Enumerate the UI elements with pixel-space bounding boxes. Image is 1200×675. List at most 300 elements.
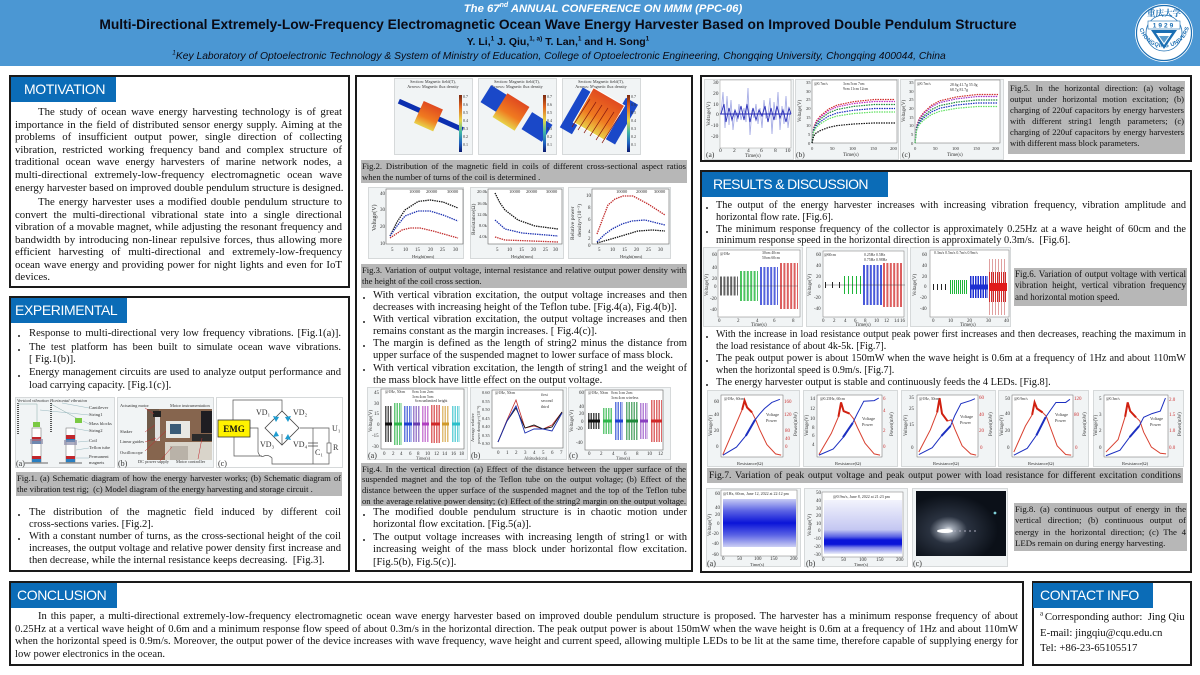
figure 6: excitation voltage charts: 10 bbox=[948, 319, 954, 324]
figure 7: load resistance charts: 14 bbox=[810, 397, 816, 402]
caption: figure 4 bbox=[361, 463, 687, 506]
figure 8: continuous output charts and LED photo bbox=[706, 488, 1008, 568]
text: conclusion paragraph: low power electronics in the ocean. bbox=[15, 649, 165, 660]
figure 7: load resistance charts: 3 bbox=[1099, 413, 1102, 418]
figure 2: magnetic field simulations: 0.4 bbox=[463, 118, 468, 123]
figure 8: continuous output charts and LED photo: @1Hz, 60cm, June 12, 2022 at 22:12 pm bbox=[723, 491, 790, 497]
figure 4: vertical direction charts bbox=[367, 387, 671, 460]
icon: university logo: 重庆大学 bbox=[1147, 7, 1181, 19]
figure 7: load resistance charts: 0.0 bbox=[1169, 446, 1176, 451]
figure 4: vertical direction charts: 0cm 1cm 2cm bbox=[412, 390, 434, 394]
figure 4: vertical direction charts: Voltage(V) bbox=[369, 410, 374, 432]
title: Multi-Directional Extremely-Low-Frequency Electromagnetic Ocean Wave Energy Harvester Based on Improved Double Pendulum Structure bbox=[99, 17, 1017, 32]
figure 5: horizontal charts: 25 bbox=[806, 97, 811, 102]
figure 1a: harvester schematic: magnets bbox=[89, 460, 105, 465]
figure 5: horizontal charts: 150 bbox=[973, 146, 981, 151]
bullet list: horizontal excitation findings: [Fig.5(b), Fig.5(c)]. bbox=[373, 557, 456, 568]
figure 7: load resistance charts: Voltage(V) bbox=[904, 414, 909, 436]
bullet list: experimental setup: The test platform has been built to simulate ocean wave vibrations. bbox=[29, 342, 341, 353]
figure 4: vertical direction charts: 0 bbox=[581, 420, 584, 425]
bullet list: horizontal excitation findings: The modified double pendulum structure is in chaotic motion under bbox=[373, 507, 687, 518]
heading: conclusion: CONCLUSION bbox=[17, 587, 106, 603]
figure 8: continuous output charts and LED photo: Voltage(V) bbox=[808, 514, 813, 536]
figure 2: magnetic field simulations: 0.7 bbox=[463, 94, 468, 99]
figure 7: load resistance charts: 6 bbox=[883, 397, 886, 402]
figure 4: vertical direction charts: 0.45 bbox=[482, 416, 490, 421]
figure 2: magnetic field simulations: Arrows: Magnetic flux density bbox=[575, 84, 628, 89]
figure 7: load resistance charts: 0 bbox=[911, 446, 914, 451]
figure 3: coil height charts: Relative power bbox=[570, 206, 576, 240]
figure 5: horizontal charts bbox=[704, 79, 1004, 160]
figure 2: magnetic field simulations: 0.3 bbox=[547, 126, 552, 131]
text: motivation paragraph two: ocean wave energy and providing power for night lights and even for IoT bbox=[15, 258, 342, 270]
figure 5: horizontal charts: Voltage(V) bbox=[705, 101, 712, 126]
figure 5: horizontal charts: 30 bbox=[909, 89, 914, 94]
figure 6: excitation voltage charts: 6 bbox=[854, 319, 857, 324]
figure 6: excitation voltage charts: 6 bbox=[773, 319, 776, 324]
text: motivation paragraph one: multi-directional extremely-low-frequency electromagnetic ocean wave bbox=[15, 169, 342, 181]
figure 4: vertical direction charts: -30 bbox=[372, 445, 379, 450]
figure 4: vertical direction charts: Time(s) bbox=[616, 456, 631, 460]
figure 2: magnetic field simulations: 0.1 bbox=[631, 142, 636, 147]
figure 5: horizontal charts: 0 bbox=[719, 148, 722, 154]
bullet list: vertical excitation findings: With vertical vibration excitation, the length of string1 and the weight of bbox=[373, 363, 687, 374]
figure 6: excitation voltage charts: -20 bbox=[814, 296, 821, 301]
caption: figure 1 bbox=[16, 472, 342, 496]
text: motivation paragraph one: problems of insufficient output power, single direction of collecting bbox=[15, 131, 342, 143]
figure 7: load resistance charts: 15 bbox=[909, 423, 914, 428]
figure 3: coil height charts: 15 bbox=[519, 248, 524, 253]
figure 2: magnetic field simulations: Arrows: Magnetic flux density bbox=[407, 84, 460, 89]
figure 3: coil height charts: 40 bbox=[380, 192, 386, 197]
text: motivation paragraph two: devices. bbox=[15, 271, 50, 283]
text: motivation paragraph one: vibration, restricted working frequency band and complex structure of bbox=[15, 144, 342, 156]
figure 7: load resistance charts: Voltage bbox=[1150, 416, 1163, 421]
bullet list: results two: The peak output power is about 150mW when the wave height is 0.6m at a frequency of 1Hz and about 110mW bbox=[716, 353, 1186, 364]
figure 1c: harvesting circuit diagram: VD₄ bbox=[293, 440, 308, 449]
figure 4: vertical direction charts: 8 bbox=[417, 452, 420, 457]
bullet list: coil findings: With a constant number of turns, as the cross-sectional height of the coil bbox=[29, 531, 341, 542]
figure 4: vertical direction charts: power density×(10⁻⁵) bbox=[476, 405, 481, 444]
figure 7: load resistance charts: Resistance(Ω) bbox=[933, 461, 960, 466]
figure 4: vertical direction charts: first bbox=[541, 392, 549, 397]
figure 4: vertical direction charts: 0 bbox=[377, 423, 380, 428]
figure 6: excitation voltage charts: Voltage(V) bbox=[913, 274, 918, 296]
figure 5: horizontal charts: -10 bbox=[711, 123, 719, 129]
figure 4: vertical direction charts: -15 bbox=[372, 434, 379, 439]
figure 4: vertical direction charts: @1Hz, 50cm bbox=[385, 390, 405, 395]
figure 8: continuous output charts and LED photo: 0 bbox=[818, 529, 821, 534]
figure 5: horizontal charts: 30 bbox=[713, 80, 719, 86]
figure 2: magnetic field simulations: 0.4 bbox=[547, 118, 552, 123]
figure 7: load resistance charts: Voltage(V) bbox=[709, 414, 714, 436]
figure 3: coil height charts: 30 bbox=[380, 208, 386, 213]
figure 4: vertical direction charts: 6 bbox=[624, 452, 627, 457]
figure 7: load resistance charts: 60 bbox=[714, 400, 720, 405]
figure 5: horizontal charts: @0.7m/s bbox=[814, 82, 828, 86]
figure 7: load resistance charts: 50 bbox=[1005, 397, 1010, 402]
figure 1a: harvester schematic: Vertical vibration bbox=[17, 398, 49, 403]
caption: figure 5: charging of 220uf capacitors by energy harvesters bbox=[1010, 105, 1184, 115]
bullet list: coil findings bbox=[18, 507, 341, 566]
figure 2: magnetic field simulations: 0.7 bbox=[547, 94, 552, 99]
text: motivation paragraph one: traditional ocean wave energy harvesters of marine network nodes, a bbox=[15, 156, 342, 168]
figure 1b: vibration test rig photo: DC power supply bbox=[138, 459, 170, 464]
caption: figure 1: the vibration test rig; (c) Model diagram of the energy harvesting and storage circuit . bbox=[17, 484, 313, 494]
caption: figure 4: suspended magnet and the top of the Teflon tube on the output voltage; (b) Effect of the bbox=[362, 474, 686, 484]
bullet list: experimental setup: [ Fig.1(b)]. bbox=[29, 354, 76, 365]
figure 4: vertical direction charts: 40 bbox=[579, 405, 584, 410]
caption: figure 4: distance between the upper surface of the suspended magnet and the top of the Teflon tube bbox=[362, 485, 686, 495]
figure 6: excitation voltage charts: 4 bbox=[844, 319, 847, 324]
panel: results and discussion bbox=[700, 170, 1192, 573]
heading: conclusion bbox=[11, 583, 117, 608]
caption: figure 8: Fig.8. (a) continuous output of energy in the bbox=[1015, 504, 1186, 514]
figure 7: load resistance charts: 0 bbox=[716, 445, 719, 450]
figure 2: magnetic field simulations: 0.2 bbox=[631, 134, 636, 139]
figure 3: coil height charts: 10 bbox=[610, 248, 616, 253]
bullet list: coil findings: then decrease, while the internal resistance keeps decreasing. [Fig.3]. bbox=[29, 555, 325, 566]
figure 7: load resistance charts: 6 bbox=[812, 434, 815, 439]
figure 3: coil height charts: 16.0k bbox=[477, 201, 488, 206]
figure 3: coil height charts: 20.0k bbox=[477, 189, 488, 194]
figure 2: magnetic field simulations: Section: Magnetic field(T), bbox=[410, 79, 456, 85]
text: conclusion paragraph: In this paper, a multi-directional extremely-low-frequency electromagnetic ocean wave energy harvester based on improved double pendulum structure is proposed. The harvester has a minimum response frequency of about bbox=[38, 611, 1018, 622]
figure 1c: harvesting circuit diagram: (c) bbox=[218, 459, 227, 468]
caption: figure 4: Fig.4. In the vertical direction (a) Effect of the distance between the upper surface of the bbox=[362, 464, 686, 474]
figure 7: load resistance charts: Voltage(V) bbox=[1094, 414, 1099, 436]
figure 1c: harvesting circuit diagram: EMG bbox=[223, 424, 245, 434]
figure 6: excitation voltage charts: 60 bbox=[712, 253, 718, 258]
figure 7: load resistance charts: 120 bbox=[1074, 397, 1082, 402]
figure 5: horizontal charts: 10 bbox=[785, 148, 791, 154]
figure 1a: harvester schematic: Permanent bbox=[89, 454, 109, 459]
figure 4: vertical direction charts: 6cm unlimited height bbox=[415, 399, 448, 403]
figure 2: magnetic field simulations: 0.3 bbox=[631, 126, 636, 131]
figure 6: excitation voltage charts: Voltage(V) bbox=[808, 274, 813, 296]
figure 8: continuous output charts and LED photo: @0.9m/s, June 8, 2022 at 21:23 pm bbox=[833, 494, 891, 500]
figure 2: magnetic field simulations: 0.1 bbox=[547, 142, 552, 147]
figure 4: vertical direction charts: Altitude(cm) bbox=[524, 456, 548, 460]
figure 4: vertical direction charts: 4 bbox=[612, 452, 615, 457]
figure 3: coil height charts: Voltage(V) bbox=[371, 204, 378, 231]
caption: figure 8: energy in the horizontal direction; (c) The 4 bbox=[1015, 527, 1186, 537]
figure 3: coil height charts: 8 bbox=[588, 206, 591, 211]
figure 5: horizontal charts: (a) bbox=[706, 150, 715, 159]
figure 5: horizontal charts: 5 bbox=[808, 132, 811, 137]
figure 7: load resistance charts: Resistance(Ω) bbox=[1122, 461, 1149, 466]
text: conclusion paragraph bbox=[15, 611, 1018, 660]
figure 4: vertical direction charts: 2 bbox=[515, 451, 518, 456]
figure 3: coil height charts: 2 bbox=[588, 237, 591, 242]
figure 6: excitation voltage charts: 40 bbox=[1004, 319, 1010, 324]
figure 7: load resistance charts: 35 bbox=[909, 396, 914, 401]
figure 6: excitation voltage charts: 8 bbox=[792, 319, 795, 324]
figure 6: excitation voltage charts: -40 bbox=[814, 307, 821, 312]
bullet list: vertical excitation findings: remains constant as the margin increases. [ Fig.4(c)]. bbox=[373, 326, 597, 337]
figure 1b: vibration test rig photo: Motor controller bbox=[176, 459, 206, 464]
figure 6: excitation voltage charts: 20 bbox=[712, 277, 718, 282]
figure 2: magnetic field simulations: 0.5 bbox=[463, 110, 468, 115]
figure 8: continuous output charts and LED photo: 40 bbox=[715, 506, 720, 511]
figure 2: magnetic field simulations: Arrows: Magnetic flux density bbox=[491, 84, 544, 89]
bullet list: coil findings: increases, the output voltage and relative power density first increase and bbox=[29, 543, 341, 554]
figure 7: load resistance charts: 40 bbox=[1005, 412, 1010, 417]
figure 7: load resistance charts: 80 bbox=[1074, 413, 1080, 418]
figure 2: magnetic field simulations: 0.2 bbox=[463, 134, 468, 139]
figure 7: load resistance charts: Resistance(Ω) bbox=[1028, 461, 1055, 466]
bullet list: coil findings: The distribution of the magnetic field induced by different coil bbox=[29, 507, 341, 518]
figure 7: load resistance charts: Resistance(Ω) bbox=[737, 461, 764, 466]
figure 6: excitation voltage charts: 8 bbox=[864, 319, 867, 324]
figure 3: coil height charts: 30000 bbox=[654, 189, 666, 194]
figure 6: excitation voltage charts: 30 bbox=[986, 319, 992, 324]
caption: figure 5: with different string1 length parameters; (c) bbox=[1010, 116, 1184, 126]
figure 3: coil height charts: 10 bbox=[380, 242, 386, 247]
text: motivation paragraph two: The energy harvester uses a modified double pendulum structure to bbox=[38, 196, 342, 208]
figure 5: horizontal charts: 25 bbox=[909, 97, 914, 102]
figure 8: continuous output charts and LED photo: -10 bbox=[814, 537, 821, 542]
figure 7: load resistance charts: Power(mW) bbox=[989, 412, 994, 436]
figure 4: vertical direction charts: 10 bbox=[425, 452, 430, 457]
figure 7: load resistance charts: 0 bbox=[980, 446, 983, 451]
figure 7: load resistance charts: Power bbox=[1150, 422, 1162, 427]
figure 5: horizontal charts: 50 bbox=[830, 146, 835, 151]
figure 8: continuous output charts and LED photo: 50 bbox=[841, 558, 846, 563]
bullet list: horizontal excitation findings bbox=[363, 507, 687, 568]
figure 4: vertical direction charts: 6 bbox=[409, 452, 412, 457]
figure 7: load resistance charts: Voltage bbox=[862, 416, 875, 421]
figure 6: excitation voltage charts: 0 bbox=[714, 285, 717, 290]
figure 4: vertical direction charts: 3cm 4cm 5cm bbox=[412, 395, 434, 399]
figure 1c: harvesting circuit diagram: U₁ bbox=[332, 424, 341, 433]
figure 4: vertical direction charts: 1 bbox=[506, 451, 509, 456]
figure 5: horizontal charts: Voltage(V) bbox=[902, 100, 907, 122]
figure 3: coil height charts: 20 bbox=[428, 248, 434, 253]
figure 5: horizontal charts: 0 bbox=[811, 146, 814, 151]
figure 7: load resistance charts: 12 bbox=[810, 407, 816, 412]
text: motivation paragraph two: bandwidth by introducing non-linear repulsive forces, thus allowing more bbox=[15, 234, 342, 246]
figure 5: horizontal charts: 20 bbox=[909, 106, 914, 111]
caption: figure 3: Fig.3. Variation of output voltage, internal resistance and relative output power density with bbox=[362, 265, 686, 275]
caption: figure 1: Fig.1. (a) Schematic diagram of how the energy harvester works; (b) Schematic diagram of bbox=[17, 473, 341, 483]
figure 8: continuous output charts and LED photo: (c) bbox=[913, 559, 922, 568]
figure 7: load resistance charts: Power(mW) bbox=[890, 412, 895, 436]
figure 5: horizontal charts: 20 bbox=[713, 91, 719, 97]
figure 7: load resistance charts: 120 bbox=[784, 413, 792, 418]
figure 7: load resistance charts: 10 bbox=[810, 417, 816, 422]
figure 5: horizontal charts: 8 bbox=[774, 148, 777, 154]
figure 1a: harvester schematic bbox=[15, 397, 115, 468]
bullet list: horizontal excitation findings: horizontal flow excitation. [Fig.5(a)]. bbox=[373, 519, 531, 530]
figure 8: continuous output charts and LED photo: Time(s) bbox=[750, 562, 765, 567]
text: conclusion paragraph: 0.25Hz at a vertical wave height of 0.6m and a minimum response flow speed of about 0.3m/s in the horizontal direction. The peak output power is about 150mW when the wave height is 0.6m at a frequency of 1Hz and about 110mW bbox=[15, 624, 1018, 635]
figure 6: excitation voltage charts: 40 bbox=[922, 264, 928, 269]
figure 4: vertical direction charts: @1Hz, 50cm bbox=[588, 391, 608, 396]
caption: figure 2: when the number of turns of the coil is determined . bbox=[362, 172, 540, 182]
bullet list: results one: minimum response speed in the horizontal direction is approximately 0.3m/s. [Fig.6]. bbox=[716, 235, 1070, 246]
figure 8: continuous output charts and LED photo: Time(s) bbox=[854, 562, 869, 567]
figure 3: coil height charts: 25 bbox=[440, 248, 446, 253]
figure 4: vertical direction charts: 0cm 1cm 2cm bbox=[611, 391, 633, 395]
figure 8: continuous output charts and LED photo: 20 bbox=[816, 514, 822, 519]
figure 5: horizontal charts: 20 bbox=[806, 106, 811, 111]
caption: figure 6: vibration height, vertical vibration frequency bbox=[1015, 280, 1186, 290]
figure 5: horizontal charts: 5 bbox=[911, 132, 914, 137]
caption: figure 8: vertical direction; (b) continuous output of bbox=[1015, 515, 1186, 525]
figure 3: coil height charts: 25 bbox=[646, 248, 652, 253]
figure 6: excitation voltage charts bbox=[703, 247, 1011, 327]
figure 7: load resistance charts: Power bbox=[766, 418, 778, 423]
figure 4: vertical direction charts: 0.60 bbox=[482, 390, 490, 395]
figure 1a: harvester schematic: Coil bbox=[89, 438, 98, 443]
figure 6: excitation voltage charts: @1Hz bbox=[720, 252, 730, 256]
figure 4: vertical direction charts: 3 bbox=[524, 451, 527, 456]
figure 5: horizontal charts: 200 bbox=[890, 146, 898, 151]
figure 7: load resistance charts: 4 bbox=[883, 409, 886, 414]
figure 1c: harvesting circuit diagram: VD₁ bbox=[256, 408, 271, 417]
figure 2: magnetic field simulations: 0.6 bbox=[631, 102, 636, 107]
figure 4: vertical direction charts: Average relative bbox=[470, 413, 475, 442]
figure 8: continuous output charts and LED photo: 20 bbox=[715, 513, 720, 518]
heading: results and discussion bbox=[702, 172, 888, 197]
figure 6: excitation voltage charts: 0 bbox=[818, 285, 821, 290]
caption: figure 5: charging of 220uf capacitors by energy harvesters bbox=[1010, 127, 1184, 137]
figure 8: continuous output charts and LED photo: 200 bbox=[896, 558, 904, 563]
figure 7: load resistance charts: @0.3m/s bbox=[1106, 397, 1120, 401]
figure 2: magnetic field simulations: Section: Magnetic field(T), bbox=[578, 79, 624, 85]
figure 3: coil height charts: 20000 bbox=[526, 189, 538, 194]
figure 4: vertical direction charts: 0 bbox=[588, 452, 591, 457]
figure 6: excitation voltage charts: 60 bbox=[922, 253, 928, 258]
figure 8: continuous output charts and LED photo: 0 bbox=[822, 558, 825, 563]
figure 6: excitation voltage charts: 0 bbox=[718, 319, 721, 324]
figure 7: load resistance charts: Voltage bbox=[766, 412, 779, 417]
figure 5: horizontal charts: 100 bbox=[952, 146, 960, 151]
figure 6: excitation voltage charts: @60cm bbox=[824, 253, 836, 257]
text: motivation paragraph one: The study of ocean wave energy harvesting technology is of great bbox=[38, 106, 342, 118]
figure 7: load resistance charts: 40 bbox=[979, 413, 984, 418]
figure 8: continuous output charts and LED photo: -30 bbox=[814, 553, 821, 558]
figure 8: continuous output charts and LED photo: 150 bbox=[876, 558, 884, 563]
figure 7: load resistance charts: @1Hz, 30cm bbox=[919, 397, 939, 402]
figure 4: vertical direction charts: 6 bbox=[551, 451, 554, 456]
bullet list: vertical excitation findings: decreases with increasing height of the Teflon tube. [Fig.4(a), Fig.4(b)]. bbox=[373, 302, 677, 313]
caption: figure 7: Fig.7. Variation of peak output voltage and peak output power with load resistance for different excitation conditions bbox=[709, 470, 1181, 481]
caption: figure 2: Fig.2. Distribution of the magnetic field in coils of different cross-sectional aspect ratios bbox=[362, 161, 686, 171]
figure 4: vertical direction charts: 0.55 bbox=[482, 399, 490, 404]
figure 3: coil height charts: 10 bbox=[403, 248, 408, 253]
figure 5: horizontal charts: Time(s) bbox=[947, 153, 963, 158]
figure 2: magnetic field simulations: 0.7 bbox=[631, 94, 636, 99]
figure 5: horizontal charts: 10 bbox=[806, 123, 811, 128]
figure 6: excitation voltage charts: 0 bbox=[932, 319, 935, 324]
figure 6: excitation voltage charts: -40 bbox=[920, 307, 927, 312]
heading: contact info bbox=[1033, 583, 1153, 608]
figure 7: load resistance charts: 0 bbox=[1099, 446, 1102, 451]
bullet list: coil findings: cross-sections varies. [Fig.2]. bbox=[29, 519, 153, 530]
figure 4: vertical direction charts: 10 bbox=[647, 452, 652, 457]
figure 8: continuous output charts and LED photo: -20 bbox=[712, 532, 719, 537]
figure 5: horizontal charts: 35 bbox=[806, 80, 811, 85]
figure 7: load resistance charts: 2 bbox=[883, 429, 886, 434]
figure 4: vertical direction charts: 12 bbox=[658, 452, 664, 457]
figure 8: continuous output charts and LED photo: 150 bbox=[770, 557, 778, 562]
figure 4: vertical direction charts: 14 bbox=[442, 452, 448, 457]
figure 3: coil height charts: 10000 bbox=[616, 189, 628, 194]
figure 3: coil height charts: 5 bbox=[496, 248, 499, 253]
figure 4: vertical direction charts: @1Hz, 50cm bbox=[495, 391, 515, 396]
panel: middle results column bbox=[355, 75, 693, 572]
bullet list: vertical excitation findings: upper surface of the suspended magnet to lower surface of mass block. bbox=[373, 350, 673, 361]
figure 3: coil height charts: Height(mm) bbox=[511, 254, 534, 259]
bullet list: results two: when the horizontal speed is 0.9m/s. [Fig.7]. bbox=[716, 365, 894, 376]
figure 5: horizontal charts: 15 bbox=[909, 115, 914, 120]
figure 7: load resistance charts: @0.9m/s bbox=[1014, 397, 1028, 401]
figure 4: vertical direction charts: Time(s) bbox=[416, 456, 431, 460]
figure 5: horizontal charts: (b) bbox=[796, 150, 805, 159]
figure 7: load resistance charts bbox=[707, 390, 1184, 467]
figure 3: coil height charts: 20000 bbox=[426, 189, 438, 194]
figure 3: coil height charts: 15 bbox=[622, 248, 628, 253]
conference line: The 67nd ANNUAL CONFERENCE ON MMM (PPC-06) bbox=[464, 2, 742, 15]
panel: conclusion bbox=[9, 581, 1024, 666]
figure 1a: harvester schematic: String1 bbox=[89, 412, 103, 417]
figure 7: load resistance charts: 0 bbox=[785, 445, 788, 450]
figure 7: load resistance charts: 1.5 bbox=[1169, 413, 1176, 418]
caption: figure 5: Fig.5. In the horizontal direction: (a) voltage bbox=[1010, 83, 1184, 93]
figure 2: magnetic field simulations: 0.2 bbox=[547, 134, 552, 139]
figure 7: load resistance charts: Power bbox=[862, 422, 874, 427]
figure 3: coil height charts: 30000 bbox=[546, 189, 558, 194]
figure 5: horizontal charts: 50 bbox=[933, 146, 938, 151]
text: motivation paragraph two: efficient harvesting of multi-directional and extremely-low-frequency bbox=[15, 246, 342, 258]
figure 3: coil height charts: Height(mm) bbox=[620, 254, 643, 259]
figure 3: coil height charts: 4.0k bbox=[479, 234, 488, 239]
figure 1a: harvester schematic: Mass blocks bbox=[89, 421, 112, 426]
figure 3: coil height charts: 12.0k bbox=[477, 212, 488, 217]
figure 7: load resistance charts: Resistance(Ω) bbox=[835, 461, 862, 466]
figure 3: coil height charts: 10000 bbox=[409, 189, 421, 194]
caption: figure 5: output under horizontal motion excitation; (b) bbox=[1010, 94, 1184, 104]
figure 5: horizontal charts: 35 bbox=[909, 80, 914, 85]
figure 5: horizontal charts: 0 bbox=[914, 146, 917, 151]
caption: figure 8 bbox=[1014, 503, 1187, 551]
figure 1a: harvester schematic: String2 bbox=[89, 428, 103, 433]
figure 2: magnetic field simulations bbox=[394, 78, 641, 155]
figure 2: magnetic field simulations: 0.5 bbox=[547, 110, 552, 115]
figure 7: load resistance charts: 25 bbox=[909, 407, 914, 412]
figure 3: coil height charts: 20 bbox=[380, 225, 386, 230]
figure 7: load resistance charts: Voltage bbox=[1055, 412, 1068, 417]
figure 4: vertical direction charts: 0.30 bbox=[482, 441, 490, 446]
figure 5: horizontal charts: 0 bbox=[716, 112, 719, 118]
caption: figure 5: with different mass block parameters. bbox=[1010, 138, 1139, 148]
figure 1a: harvester schematic: Teflon tube bbox=[89, 445, 110, 450]
figure 7: load resistance charts: 5 bbox=[1099, 397, 1102, 402]
figure 1b: vibration test rig photo: (b) bbox=[118, 459, 128, 468]
figure 8: continuous output charts and LED photo: -60 bbox=[712, 553, 719, 558]
figure 6: excitation voltage charts: 20 bbox=[816, 275, 822, 280]
figure 4: vertical direction charts: 0.40 bbox=[482, 424, 490, 429]
figure 3: coil height charts: 5 bbox=[391, 248, 394, 253]
figure 8: continuous output charts and LED photo: Voltage(V) bbox=[708, 514, 713, 536]
figure 6: excitation voltage charts: 0 bbox=[924, 285, 927, 290]
text: contact details bbox=[1040, 609, 1185, 654]
figure 4: vertical direction charts: 8 bbox=[636, 452, 639, 457]
figure 7: load resistance charts: Voltage(V) bbox=[805, 414, 810, 436]
header banner bbox=[0, 0, 1200, 66]
